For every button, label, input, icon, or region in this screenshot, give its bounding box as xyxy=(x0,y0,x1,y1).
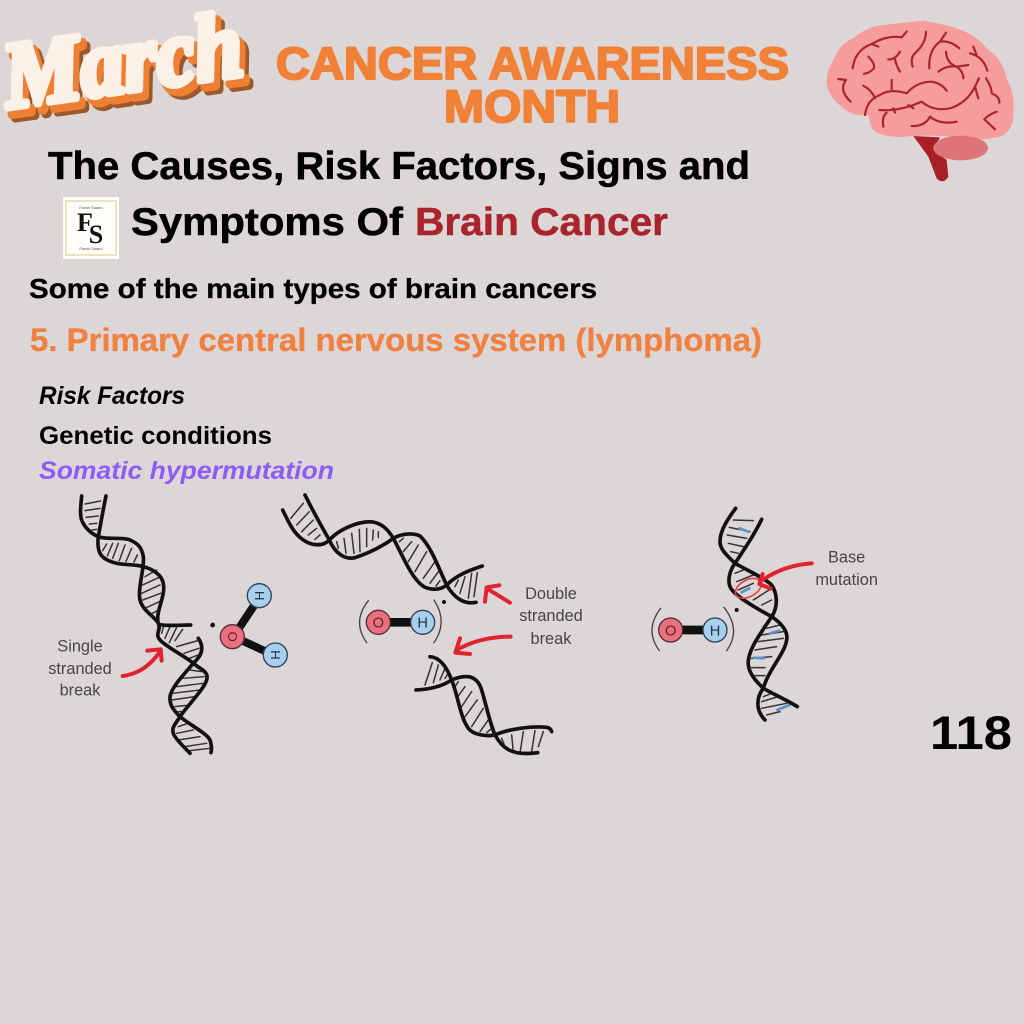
helix: single strand DNA xyxy=(80,496,211,753)
label: double stranded break xyxy=(519,585,583,648)
heading: Cancer Awareness Month xyxy=(276,38,789,132)
label: base mutation xyxy=(815,549,878,589)
molecule: hydroxyl radical xyxy=(360,600,446,643)
molecule: hydroxyl radical xyxy=(652,607,739,651)
label: single stranded break: Single xyxy=(57,638,103,656)
label: base mutation: Base xyxy=(828,549,865,567)
heading: causes, risk factors, signs and symptoms xyxy=(48,145,750,244)
label: single stranded break: stranded xyxy=(48,660,112,678)
label: double stranded break: break xyxy=(531,630,572,648)
text: genetic conditions: Genetic conditions xyxy=(39,422,272,450)
heading: causes, risk factors, signs and symptoms: The Causes, Risk Factors, Signs and xyxy=(48,145,750,188)
text: risk factors: Risk Factors xyxy=(39,382,185,410)
heading: causes, risk factors, signs and symptoms: Brain Cancer xyxy=(415,201,668,244)
callout: mutation ring and arrow xyxy=(732,563,812,602)
heading: Cancer Awareness Month: MONTH xyxy=(444,81,620,132)
logo: FS badge: F xyxy=(77,208,93,237)
molecule: water radical: O xyxy=(225,631,240,642)
molecule: hydroxyl radical: H xyxy=(710,623,720,639)
heading: causes, risk factors, signs and symptoms: Symptoms Of xyxy=(131,201,404,244)
diagram: single stranded break xyxy=(48,496,287,753)
callout arrows xyxy=(455,585,511,654)
molecule: hydroxyl radical: H xyxy=(417,616,428,632)
logo: FS badge: Farah Saaed xyxy=(79,246,103,251)
label: single stranded break: break xyxy=(60,682,101,700)
logo: FS badge: S xyxy=(89,220,103,249)
label: double stranded break: Double xyxy=(525,585,577,603)
helix: broken DNA upper xyxy=(283,495,482,603)
callout arrow xyxy=(123,649,162,676)
subheading: lymphoma: 5. Primary central nervous system (lymphoma) xyxy=(30,322,762,358)
diagram: double stranded break xyxy=(283,495,583,754)
label: base mutation: mutation xyxy=(815,571,878,589)
helix: mutated DNA xyxy=(720,508,797,720)
subheading: main types: Some of the main types of brain cancers xyxy=(29,273,597,304)
text: somatic hypermutation: Somatic hypermutation xyxy=(39,457,334,485)
molecule: hydroxyl radical: O xyxy=(665,623,676,639)
page number: 118 xyxy=(930,706,1012,759)
molecule: hydroxyl radical: O xyxy=(373,616,384,632)
title lettering: March: March xyxy=(3,2,257,139)
molecule: water radical: H xyxy=(252,591,267,600)
icon: brain xyxy=(827,21,1014,181)
molecule: water radical: H xyxy=(268,650,283,660)
molecule: water radical xyxy=(210,584,287,667)
label: single stranded break xyxy=(48,638,112,700)
logo: FS badge xyxy=(63,197,119,259)
title lettering: March: March xyxy=(0,0,254,135)
label: double stranded break: stranded xyxy=(519,607,583,625)
heading: Cancer Awareness Month: CANCER AWARENESS xyxy=(276,38,789,89)
diagram: base mutation xyxy=(652,508,878,720)
logo: FS badge: Farah Saaed xyxy=(79,205,103,210)
helix: broken DNA lower xyxy=(416,657,552,754)
